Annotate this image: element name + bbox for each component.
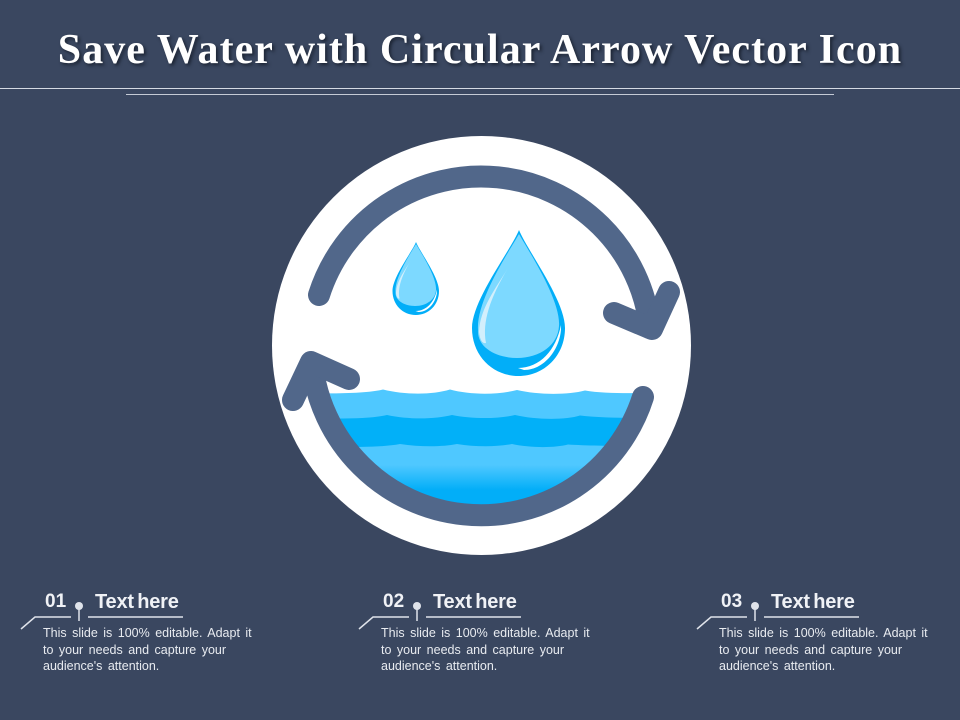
body 02: [381, 626, 590, 673]
body 02: to your needs and capture your: [381, 642, 564, 656]
main graphic: [0, 88, 960, 555]
number 01: 01: [45, 591, 66, 612]
number 03: 03: [721, 591, 742, 612]
body 02: audience's attention.: [381, 659, 497, 673]
body 03: to your needs and capture your: [719, 642, 902, 656]
arrow: top clockwise: [319, 177, 669, 329]
heading 03: Text here: [771, 591, 855, 613]
heading 02: Text here: [433, 591, 517, 613]
item 02: [358, 591, 590, 673]
body 03: audience's attention.: [719, 659, 835, 673]
connector 02: [358, 602, 521, 630]
heading 01: Text here: [95, 591, 179, 613]
body 01: This slide is 100% editable. Adapt it: [43, 626, 252, 640]
icon: large water drop: [472, 230, 565, 376]
connector 03: [696, 602, 859, 630]
body 01: [43, 626, 252, 673]
number 02: 02: [383, 591, 404, 612]
body 02: This slide is 100% editable. Adapt it: [381, 626, 590, 640]
icon: small water drop: [392, 242, 439, 315]
arrow: bottom clockwise: [293, 362, 643, 515]
water: [330, 390, 633, 504]
item 03: [696, 591, 928, 673]
connector 01: [20, 602, 183, 630]
title: Save Water with Circular Arrow Vector Icon: [58, 27, 902, 73]
body 01: audience's attention.: [43, 659, 159, 673]
body 01: to your needs and capture your: [43, 642, 226, 656]
white circle: [272, 136, 691, 555]
item 01: [20, 591, 252, 673]
body 03: This slide is 100% editable. Adapt it: [719, 626, 928, 640]
body 03: [719, 626, 928, 673]
